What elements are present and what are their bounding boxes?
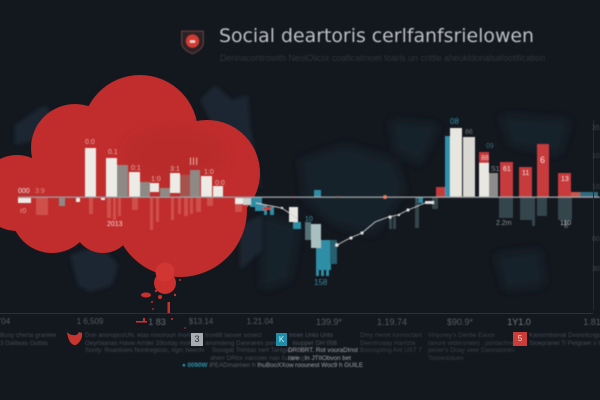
trend line <box>256 203 425 245</box>
chart value labels: 000 <box>18 188 30 195</box>
icon: grey square: 3 <box>194 334 200 344</box>
icon: shield logo <box>180 30 204 55</box>
footer column 6: Ianore widersrates . pontachne <box>428 340 514 346</box>
footer column 4 highlighted: rare In JTIIObvon bet <box>288 354 351 362</box>
chart value labels: 6 <box>540 155 545 165</box>
footer note: aherr DRtor narcoler nan fuJiniisg <box>210 354 304 362</box>
map shapes behind the cloud <box>15 85 262 292</box>
timeline labels: 1.21.04 <box>247 317 273 326</box>
chart value labels: 1:0 <box>151 176 161 183</box>
chart value labels: 11 <box>522 170 529 177</box>
icon: grey square <box>191 333 203 346</box>
right axis <box>593 120 594 310</box>
bar chart: right group <box>436 128 598 197</box>
footer column 1 <box>0 332 56 346</box>
chart value labels: S1 <box>491 166 500 173</box>
footer column 4 highlighted: DR0BRT. Rot vouraDInst <box>288 347 358 354</box>
chart value labels: 1:0 <box>204 169 214 176</box>
footer column 6 <box>428 332 515 362</box>
footer column 5: Deestroaay Hantzla <box>360 340 415 346</box>
chart value labels: 08 <box>450 117 459 126</box>
subtitle: Dennacontrowith NeolOlicor coaficatmoet toarls un cnttle aheukldonalsafootification <box>220 53 545 63</box>
chart value labels: 13 <box>561 176 569 183</box>
chart value labels: 2.2m <box>496 220 512 227</box>
zero axis <box>18 196 600 198</box>
footer column 4 highlighted <box>288 346 364 369</box>
footer column 2: Don anorupcoUN. etas ronoroun Inorle <box>85 332 194 339</box>
timeline labels: 1 6,509 <box>77 317 103 326</box>
chart value labels: 88 <box>481 155 489 162</box>
icon: teal square: K <box>279 335 284 344</box>
footer column 5: Bocoupting Ant UST 7 <box>360 347 422 354</box>
footer column 3: Irontitt taoser sosect <box>205 332 262 339</box>
red splatter <box>136 262 186 329</box>
chart value labels: 2013 <box>107 221 123 228</box>
chart value labels: 60 <box>592 236 600 243</box>
chart value labels: r0 <box>20 208 26 215</box>
icon: red square: 5 <box>518 334 522 343</box>
footer column 6: peoer's Doay oeer Dannalones <box>428 347 515 354</box>
chart value labels: 0.0 <box>85 139 95 146</box>
chart value labels: 0:1 <box>131 165 141 172</box>
footer column 3 <box>205 332 292 354</box>
chart value labels: 3:9 <box>35 188 45 195</box>
footer column 2: Oeyrtaanas Havw Arrder 33cotay moinge <box>85 340 200 346</box>
chart value labels: III <box>189 156 198 168</box>
title: Social deartoris cerlfanfsrielowen <box>219 25 534 47</box>
chart value labels: 10 <box>592 184 600 191</box>
timeline labels <box>0 317 600 327</box>
chart value labels: 61 <box>503 166 511 173</box>
footer rule <box>0 313 593 314</box>
timeline labels: 1Y1.0 <box>507 317 531 327</box>
chart value labels: 86 <box>465 129 473 136</box>
chart value labels: 09 <box>486 143 494 150</box>
timeline labels: 1 83 <box>148 317 166 327</box>
timeline labels: $13.14 <box>189 317 213 326</box>
footer column 3: anonsteng Dannares parec <box>205 340 281 346</box>
timeline labels: '04 <box>0 317 10 326</box>
chart value labels: 35 <box>592 125 600 132</box>
icon: red heart <box>67 332 82 346</box>
chart value labels: 30 <box>592 266 600 273</box>
footer column 6: Toorectoiues <box>428 354 464 362</box>
footer column 2 <box>85 332 204 354</box>
chart value labels: 110 <box>560 220 571 227</box>
lower shadow bars <box>389 198 572 229</box>
chart value labels: 158 <box>314 278 327 287</box>
footer column 5: Dmy meret Ionnoctant <box>360 332 422 339</box>
footer column 2: Sonty: Roanloies Nontregicoc, rigrc heecfn <box>85 347 204 354</box>
footer column 4 <box>289 332 337 346</box>
red cloud <box>0 75 260 329</box>
bar chart: left group <box>18 128 600 276</box>
footer column 7 <box>529 332 600 347</box>
world map silhouette <box>262 115 570 290</box>
chart value labels: 0:0 <box>215 180 225 187</box>
footer column 6: Vinjuney's Dentie Eaoor <box>428 332 495 339</box>
chart value labels: 3:1 <box>170 166 180 173</box>
darker tone inside the cloud <box>125 125 225 185</box>
icon: teal square <box>276 333 287 346</box>
footer column 4: Inner Unto Unts <box>289 332 333 339</box>
teal and white descending bars <box>250 190 423 276</box>
timeline labels: $90.9* <box>447 317 473 327</box>
footer caption: ● 0090W iPEADmaimen h IhuBooXXow <box>182 362 294 369</box>
timeline labels: 139.9* <box>316 317 342 327</box>
footer column 1: Busy cherta grantee <box>0 332 56 339</box>
footer column 1: 3 Daliteas Outlas <box>0 340 48 346</box>
chart value labels: 0.1 <box>108 149 118 156</box>
chart value labels: 10 <box>305 216 313 223</box>
footer column 4: Ioupper DH 008 <box>292 340 337 346</box>
timeline labels: 1.19.74 <box>377 317 407 327</box>
icon: red square <box>513 332 527 346</box>
footer column 4 highlighted: roounest Woc9 h GUILE <box>295 362 363 369</box>
chart value labels: 10 <box>592 153 600 160</box>
footer column 5 <box>360 332 422 354</box>
footer column 3: Sroogat Trimtas nert TaHgan <box>212 347 292 354</box>
